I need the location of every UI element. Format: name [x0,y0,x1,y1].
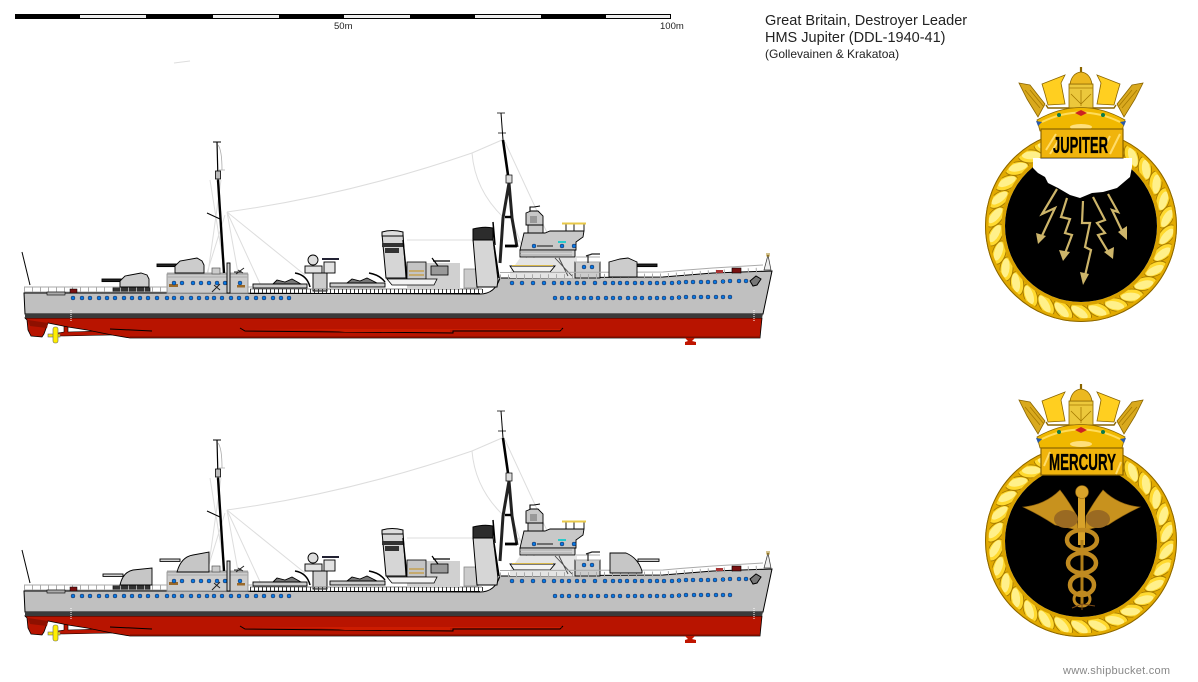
bridge [510,206,600,278]
midship deckhouse and boat [387,258,478,289]
draught marks [71,310,754,322]
lightning bolts [1036,189,1127,285]
ensign staff [22,252,30,285]
after funnel [382,230,407,279]
gun turrets, lower ship [103,552,659,585]
naval crown, upper crest [1019,67,1143,131]
forecastle rail [500,265,763,277]
name plaque JUPITER: JUPITER [1053,132,1108,158]
scale bar: 50m [334,21,353,32]
deck fittings [47,268,741,295]
title text block: HMS Jupiter (DDL-1940-41) [765,30,946,46]
rigging [207,140,556,288]
aft deck rail [24,287,252,292]
searchlight platform [305,255,339,291]
after deckhouse [167,263,248,293]
caduceus emblem [1023,486,1140,610]
title text block: Great Britain, Destroyer Leader [765,13,967,29]
skeg and shaft [58,322,112,336]
gun turrets, upper ship [102,258,657,287]
name plaque MERCURY: MERCURY [1049,449,1116,475]
white cloud [1033,158,1132,198]
ship profile: 1940 configuration [22,113,772,345]
aft boat davits and torpedo tubes [253,273,385,288]
title text block: (Gollevainen & Krakatoa) [765,47,899,61]
lower crest rope ring [982,442,1180,640]
ring, shared rope border, upper crest [982,127,1180,325]
anchor [750,276,761,286]
jack staff [764,253,771,270]
second ship profile: 1941 configuration [22,411,772,643]
website credit: www.shipbucket.com [1062,665,1170,677]
propeller [48,327,60,343]
bow appendage [685,338,696,345]
grey upper hull [24,271,772,314]
aft portholes [71,296,291,300]
name plaque MERCURY [1041,448,1123,475]
forward funnel [473,222,499,287]
waterline band [25,314,763,318]
naval crown, lower crest [1019,384,1143,448]
name plaque JUPITER [1041,129,1123,158]
main mast [207,142,225,273]
title text block [765,13,967,61]
midship deck rail [250,289,484,294]
scale bar [15,14,684,32]
forward portholes [510,279,748,300]
gun base ring [113,287,150,292]
red lower hull [25,318,762,338]
scale bar: 100m [660,21,684,32]
fore mast [497,113,517,263]
